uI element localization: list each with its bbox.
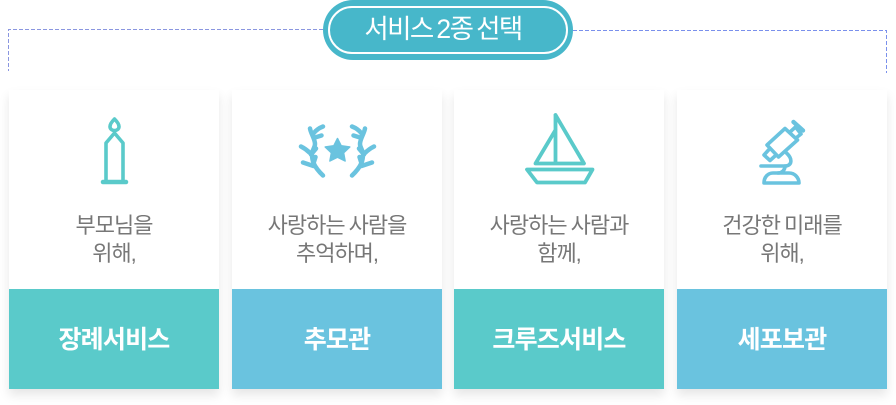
left laurel branch xyxy=(301,126,323,176)
service label band: 장례서비스 xyxy=(58,326,170,354)
panel: cell storage xyxy=(677,90,887,389)
icon: candle xyxy=(100,117,128,184)
description text: 사랑하는 사람을 xyxy=(268,213,406,238)
description text: 위해, xyxy=(92,241,136,266)
description text: 건강한 미래를 xyxy=(722,213,842,238)
service label band xyxy=(677,289,887,389)
star xyxy=(325,138,350,161)
description text: 함께, xyxy=(537,241,581,266)
panel: memorial hall xyxy=(232,90,442,389)
title text: 서비스 2종 선택 xyxy=(364,14,522,44)
description text: 부모님을 xyxy=(76,213,152,238)
description text xyxy=(76,213,152,266)
title pill inner outline xyxy=(328,6,568,54)
description text: 사랑하는 사람과 xyxy=(490,213,628,238)
service label band xyxy=(454,289,664,389)
service label band: 세포보관 xyxy=(738,326,826,354)
service label band xyxy=(232,289,442,389)
right laurel branch xyxy=(352,126,374,176)
panel: funeral service xyxy=(9,90,219,389)
description text xyxy=(490,213,629,266)
service label band: 추모관 xyxy=(304,326,370,354)
service label band: 크루즈서비스 xyxy=(492,326,626,354)
icon: microscope xyxy=(759,120,806,185)
title pill xyxy=(323,0,573,60)
panel: cruise service xyxy=(454,90,664,389)
service label band xyxy=(9,289,219,389)
dashed bracket frame xyxy=(8,29,887,73)
description text xyxy=(722,213,842,266)
icon: laurel wreath and star xyxy=(298,124,376,178)
description text xyxy=(268,213,406,266)
description text: 추억하며, xyxy=(296,241,378,266)
icon: sailboat xyxy=(525,113,594,184)
description text: 위해, xyxy=(760,241,804,266)
